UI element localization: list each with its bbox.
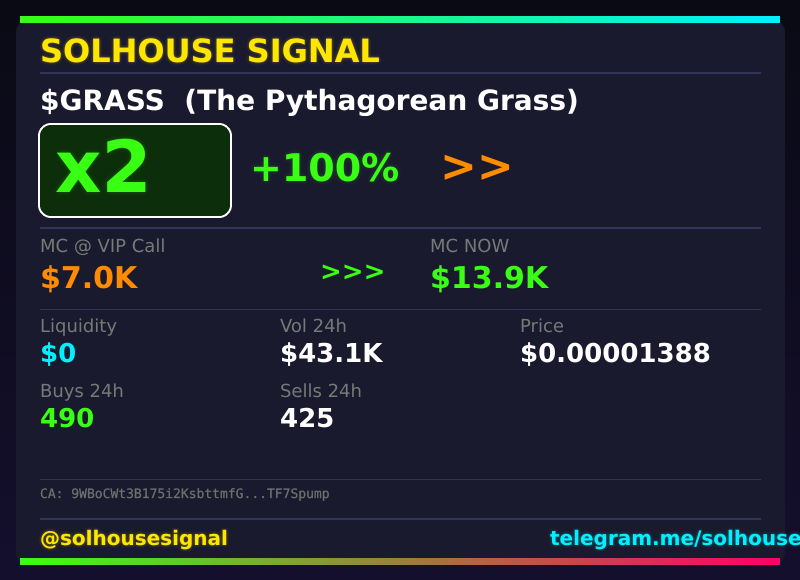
stat: buys: 490 bbox=[40, 404, 94, 434]
bottom gradient bar bbox=[20, 558, 780, 565]
percent gain: +100% bbox=[250, 146, 399, 190]
market cap at call bbox=[40, 236, 165, 296]
stat: volume bbox=[280, 316, 383, 369]
market cap now: MC NOW bbox=[430, 236, 509, 257]
stat: sells: Sells 24h bbox=[280, 381, 362, 402]
stat: price bbox=[520, 316, 711, 369]
orange arrows: >> bbox=[440, 141, 514, 192]
token name: $GRASS (The Pythagorean Grass) bbox=[40, 84, 579, 117]
stat: buys: Buys 24h bbox=[40, 381, 124, 402]
multiplier badge: x2 bbox=[55, 125, 152, 209]
stat: liquidity: Liquidity bbox=[40, 316, 117, 337]
stat: volume: $43.1K bbox=[280, 339, 383, 369]
stat: buys bbox=[40, 381, 124, 434]
footer handle: @solhousesignal bbox=[40, 526, 228, 550]
market cap at call: MC @ VIP Call bbox=[40, 236, 165, 257]
contract address: CA: 9WBoCWt3B175i2KsbttmfG...TF7Spump bbox=[40, 487, 330, 502]
stat: liquidity: $0 bbox=[40, 339, 76, 369]
stat: sells: 425 bbox=[280, 404, 334, 434]
stat: sells bbox=[280, 381, 362, 434]
stat: volume: Vol 24h bbox=[280, 316, 347, 337]
title: SOLHOUSE SIGNAL bbox=[40, 32, 380, 70]
stat: liquidity bbox=[40, 316, 117, 369]
stat: price: Price bbox=[520, 316, 564, 337]
multiplier badge bbox=[39, 124, 231, 217]
green arrows: >>> bbox=[320, 257, 385, 287]
market cap now: $13.9K bbox=[430, 261, 550, 296]
stat: price: $0.00001388 bbox=[520, 339, 711, 369]
market cap now bbox=[430, 236, 550, 296]
market cap at call: $7.0K bbox=[40, 261, 139, 296]
top gradient bar bbox=[20, 16, 780, 23]
